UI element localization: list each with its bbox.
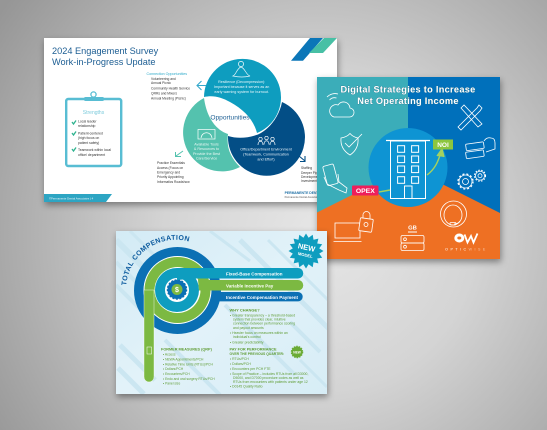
heading: slide title: Work-in-Progress Update (52, 57, 155, 67)
label: opex: OPEX (356, 188, 375, 195)
center circle (368, 128, 448, 207)
diagram: opportunities venn (183, 59, 305, 176)
heading: digital strategies title: Net Operating Income (357, 96, 459, 106)
bar: fixed-base compensation (177, 268, 303, 280)
panel: engagement survey slide (44, 38, 337, 202)
badge: new model: NEW (297, 241, 317, 254)
segment: resilience: Resilience (Decompression): (218, 80, 265, 84)
segment: resilience: early warning system for burnout. (214, 90, 269, 94)
badge: new model (288, 234, 324, 268)
segment: office environment (228, 102, 305, 176)
list: practice essentials: Emergency and (157, 170, 180, 174)
clipboard: strengths: Strengths (83, 110, 105, 116)
label: opex (352, 186, 378, 196)
list: practice essentials (157, 161, 190, 184)
icon: shield check (341, 134, 362, 155)
text: former measures: • Access (163, 352, 176, 356)
text: former measures: • Dollars/PCH (163, 367, 184, 371)
list: connection opportunities: Community Health Service (151, 86, 190, 90)
heading: digital strategies title: Digital Strategies to Increase (340, 85, 476, 95)
segment: available tools: Available Tools (194, 142, 219, 146)
segment: resilience: Important because it serves as an (214, 85, 269, 89)
badge: new seal: NEW (293, 350, 301, 354)
segment: available tools (183, 98, 240, 171)
text: pay for performance: • RTUs/PCH (230, 357, 249, 361)
list: practice essentials: Priority Appointing (157, 175, 184, 179)
logo: permanente dental (285, 191, 323, 199)
clipboard: strengths: (high focus on (78, 136, 99, 140)
list: practice essentials: Access (Focus on (157, 166, 183, 170)
segment: resilience (204, 59, 281, 133)
logo: permanente dental: PERMANENTE DENTAL (285, 191, 323, 195)
heading: slide title (52, 46, 159, 67)
arrow: to connection opportunities (197, 81, 206, 90)
logo: opticwise: OPTICWISE (445, 248, 488, 252)
text: why change: • Heavier focus on measures within an (230, 331, 288, 335)
text: why change: and payout amounts (233, 326, 264, 330)
text: pay for performance: OVER THE PREVIOUS QUARTER: (230, 352, 284, 356)
clipboard: strengths: patient safety) (78, 141, 99, 145)
list: connection opportunities: QRRs and Mixers (151, 92, 177, 96)
text: pay for performance: D5000, and D7000 procedure codes as well as (233, 376, 304, 380)
footer bar (44, 194, 112, 202)
text: former measures: • NEWA Appointments/PCH (163, 358, 204, 362)
text: pay for performance (230, 348, 308, 388)
icon: gears (458, 170, 486, 189)
text: why change: system that provides clear, intuitive (233, 318, 286, 322)
bar: variable incentive pay (198, 280, 303, 290)
badge: new model: MODEL (297, 251, 314, 259)
bar: green vertical stem (144, 290, 154, 382)
text: why change: • Greater transparency – a threshold-based (230, 314, 295, 318)
text: former measures (161, 348, 215, 386)
clipboard: strengths (66, 92, 121, 166)
list: staffing: Investment (301, 179, 317, 183)
clipboard: strengths: Local leader (78, 120, 97, 124)
segment: available tools: Care/Service (196, 157, 217, 161)
list: practice essentials: Informatics Roadshow (157, 180, 190, 184)
segment: available tools: Provide the Best (193, 152, 220, 156)
heading: total compensation arc: TOTAL COMPENSATION (121, 234, 190, 285)
list: connection opportunities (146, 72, 190, 100)
text: former measures: • Relative Time Units (RTUs)/PCH (163, 362, 213, 366)
list: connection opportunities: Annual Picnic (151, 81, 171, 85)
text: why change (230, 308, 295, 344)
icon: laptop lock (334, 212, 373, 242)
panel: digital strategies (317, 77, 500, 259)
list: staffing: Development (301, 175, 321, 179)
label: opportunities: Opportunities (210, 114, 250, 122)
icon: gb storage: GB (408, 226, 417, 232)
text: pay for performance: PAY FOR PERFORMANCE (230, 348, 277, 352)
bar: variable incentive pay: Variable Incentive Pay (226, 283, 274, 288)
panel: total compensation (113, 230, 332, 401)
badge: new seal (292, 346, 302, 358)
segment: office environment: and Effort) (257, 158, 275, 162)
list: connection opportunities: Connection Opportunities (146, 72, 187, 76)
segment: office environment: Office/Department Environment (240, 148, 292, 152)
label: noi: NOI (437, 142, 449, 149)
clipboard: strengths: Teamwork within local (78, 148, 111, 152)
text: why change: • Greater predictability (230, 340, 264, 344)
list: connection opportunities: Volunteering and (151, 77, 176, 81)
icon: gb storage (401, 226, 424, 250)
label: noi (433, 140, 453, 150)
text: pay for performance: • Dollars/PCH (230, 362, 251, 366)
icon: top right logo stripes (291, 38, 337, 61)
text: why change: individual's control (233, 335, 261, 339)
clipboard: strengths: relationship (78, 124, 95, 128)
bar: incentive compensation payment (212, 292, 303, 301)
icon: tools (458, 105, 482, 130)
arrow: growth to noi (379, 149, 444, 192)
icon: building (386, 140, 430, 198)
heading: slide title: 2024 Engagement Survey (52, 46, 159, 56)
text: pay for performance: • Scope of Practice – includes RTUs from all D3000, (230, 372, 308, 376)
logo: permanente dental: Permanente Dental Associates (285, 195, 321, 199)
text: former measures: • Panel size (163, 382, 180, 386)
segment: available tools: & Resources to (194, 147, 219, 151)
icon: phone hand (323, 164, 347, 193)
text: why change: WHY CHANGE? (230, 308, 260, 312)
arrow: to practice essentials (176, 151, 183, 156)
clipboard: strengths: office/ department (78, 153, 105, 157)
graphic: concentric rings (134, 247, 221, 334)
list: staffing: Deeper Pipeline (301, 171, 325, 175)
text: former measures: FORMER MEASURES (QRP) (161, 348, 213, 352)
segment: office environment: (Teamwork, Communication (243, 152, 289, 156)
text: pay for performance: • Encounters per PCH FTE (230, 367, 271, 371)
list: practice essentials: Practice Essentials (157, 161, 185, 165)
icon: credit cards and hand (466, 138, 495, 159)
list: connection opportunities: Annual Meeting (Picnic) (151, 96, 186, 100)
icon: headset (440, 201, 466, 227)
list: staffing (301, 166, 325, 183)
bar: incentive compensation payment: Incentive Compensation Payment (226, 295, 299, 300)
arrow: to staffing (299, 156, 305, 162)
text: former measures: • Endo and oral surgery RTUs/PCH (163, 377, 215, 381)
heading: digital strategies title (340, 85, 476, 106)
icon: cloud wifi (327, 94, 354, 117)
icon: gear dollar: $ (175, 287, 179, 294)
text: pay for performance: • D0145 Quality Ratio (230, 384, 263, 388)
logo: opticwise (445, 234, 488, 252)
footer bar: ©Permanente Dental Associates | 4 (49, 196, 94, 200)
text: former measures: • Encounters/PCH (163, 372, 190, 376)
list: staffing: Staffing (301, 166, 312, 170)
orange area (317, 184, 500, 259)
text: why change: connection between performance scoring (233, 322, 295, 326)
bar: fixed-base compensation: Fixed-Base Compensation (226, 271, 283, 276)
diagonal stripes (116, 231, 330, 395)
text: pay for performance: RTUs from encounters with patients under age 12 (233, 380, 308, 384)
clipboard: strengths: Patient-centered (78, 132, 103, 136)
